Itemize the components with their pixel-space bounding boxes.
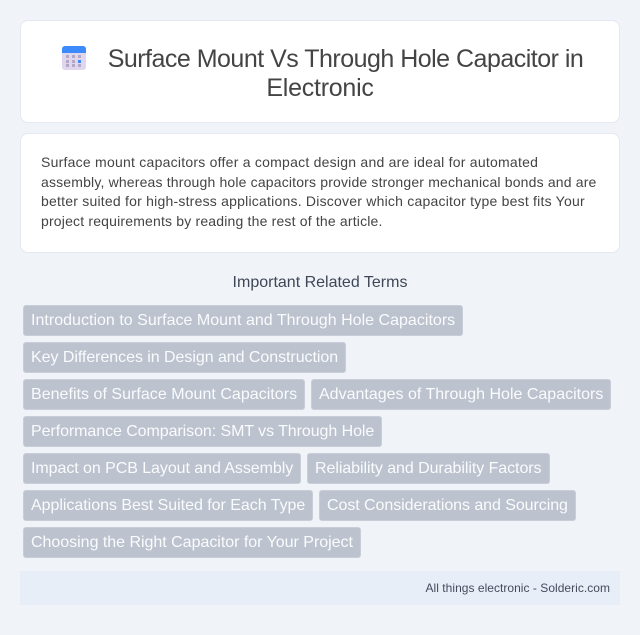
tag: Advantages of Through Hole Capacitors <box>319 386 603 403</box>
tag <box>319 490 576 521</box>
tag <box>23 342 346 373</box>
footer bar: All things electronic - Solderic.com <box>426 581 610 595</box>
tag: Impact on PCB Layout and Assembly <box>31 460 293 477</box>
heading: important related terms: Important Related Terms <box>233 274 407 291</box>
tag <box>23 490 313 521</box>
introduction text: Surface mount capacitors offer a compact design and are ideal for automated <box>41 154 538 170</box>
tag: Choosing the Right Capacitor for Your Project <box>31 534 353 551</box>
title line 2: Electronic <box>266 74 374 102</box>
tag: Reliability and Durability Factors <box>315 460 542 477</box>
introduction text <box>41 154 596 229</box>
footer bar <box>20 571 620 605</box>
panel: introduction card <box>20 133 620 253</box>
tag <box>307 453 550 484</box>
tag: Performance Comparison: SMT vs Through Hole <box>31 423 374 440</box>
introduction text: project requirements by reading the rest of the article. <box>41 212 383 228</box>
tag <box>23 416 382 447</box>
introduction text: assembly, whereas through hole capacitors provide stronger mechanical bonds and are <box>41 174 596 190</box>
tag <box>23 527 361 558</box>
tag <box>23 453 301 484</box>
title line 1: Surface Mount Vs Through Hole Capacitor in <box>108 45 583 73</box>
tag: Key Differences in Design and Construction <box>31 349 338 366</box>
panel: title card <box>20 20 620 123</box>
tag <box>23 305 463 336</box>
icon: calendar <box>62 46 86 70</box>
tag: Cost Considerations and Sourcing <box>327 497 568 514</box>
tag: Introduction to Surface Mount and Through Hole Capacitors <box>31 312 455 329</box>
tag: Applications Best Suited for Each Type <box>31 497 305 514</box>
tag <box>23 379 305 410</box>
introduction text: better suited for high-stress applications. Discover which capacitor type best fits Your <box>41 193 585 209</box>
tag <box>311 379 611 410</box>
tag: Benefits of Surface Mount Capacitors <box>31 386 297 403</box>
